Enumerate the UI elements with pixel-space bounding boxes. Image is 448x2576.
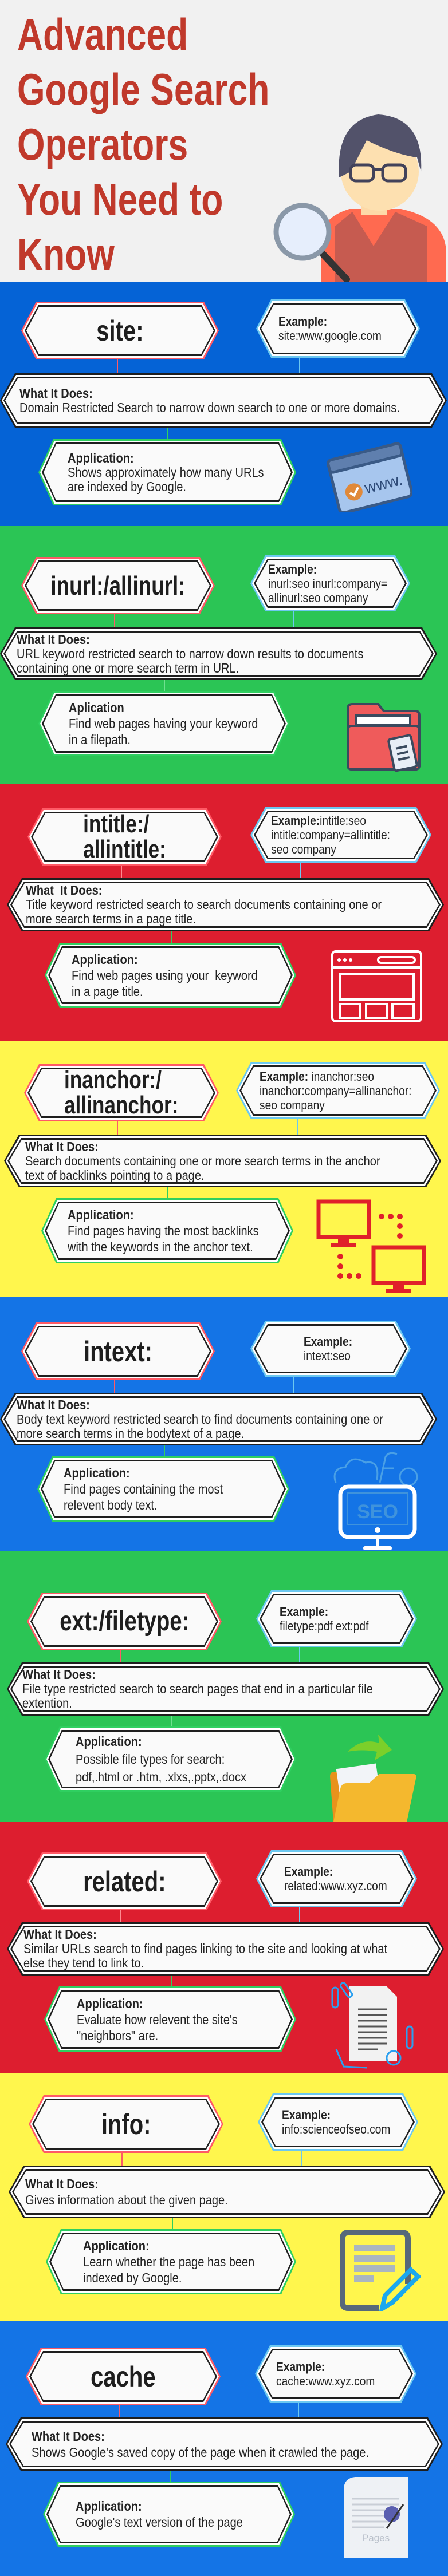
operator box <box>29 2095 223 2153</box>
example box <box>256 1850 417 1907</box>
example box: seo company <box>260 1098 325 1112</box>
application <box>45 1726 296 1792</box>
application: Application: <box>68 450 134 465</box>
example box: Example: <box>282 2108 331 2122</box>
icon: open folder with arrow <box>330 1735 416 1822</box>
application: in a filepath. <box>69 732 131 747</box>
what it does: Shows Google's saved copy of the page when it crawled the page. <box>32 2444 369 2459</box>
operator box: intext: <box>84 1335 152 1367</box>
example box <box>250 555 410 611</box>
what it does: What It Does: <box>25 2176 99 2191</box>
title: Know <box>17 229 115 279</box>
application: Find web pages using your keyword <box>72 967 258 982</box>
icon: pages document: Pages <box>362 2532 390 2543</box>
panel: site <box>0 282 448 526</box>
title: Operators <box>17 119 188 169</box>
icon: web layout <box>331 950 422 1022</box>
example box: inurl:seo inurl:company= <box>268 576 387 591</box>
example box: Example: <box>280 1605 328 1619</box>
example box: Example: <box>284 1864 333 1879</box>
operator box: info: <box>101 2108 151 2140</box>
application: Learn whether the page has been <box>83 2254 254 2269</box>
application: with the keywords in the anchor text. <box>68 1239 253 1254</box>
application <box>41 1198 293 1263</box>
what it does: else they tend to link to. <box>23 1955 144 1970</box>
title <box>17 9 269 279</box>
header <box>0 0 448 282</box>
panel: filetype <box>0 1551 448 1822</box>
application: pdf,.html or .htm, .xlxs,.pptx,.docx <box>76 1769 246 1784</box>
what it does: containing one or more search term in URL. <box>17 661 239 675</box>
example box: intitle:company=allintitle: <box>271 828 390 842</box>
icon: linked monitors <box>316 1200 426 1293</box>
application: Evaluate how relevent the site's <box>77 2012 238 2026</box>
example box: allinurl:seo company <box>268 591 368 605</box>
application <box>43 2482 295 2547</box>
example box: Example: <box>278 314 327 329</box>
application: Find pages having the most backlinks <box>68 1223 259 1238</box>
icon: notepad with pencil <box>340 2230 421 2311</box>
what it does: What It Does: <box>19 386 93 401</box>
operator box <box>21 302 219 359</box>
what it does: Domain Restricted Search to narrow down search to one or more domains. <box>19 400 400 414</box>
example box <box>236 1062 440 1119</box>
icon: www browser: www. <box>362 471 404 497</box>
example box: Example: <box>268 562 317 576</box>
icon: document with paperclips <box>331 1982 414 2069</box>
application <box>37 1456 289 1522</box>
example box: related:www.xyz.com <box>284 1879 387 1893</box>
icon: pages document <box>344 2477 408 2558</box>
what it does <box>7 878 444 931</box>
application: Application: <box>76 2499 142 2514</box>
panel: inanchor <box>0 1041 448 1297</box>
operator box <box>21 557 215 614</box>
title: Google Search <box>17 64 269 114</box>
operator box <box>21 1322 215 1380</box>
application: relevent body text. <box>64 1498 158 1512</box>
icon: folder <box>347 703 421 772</box>
what it does: extention. <box>22 1696 72 1710</box>
what it does <box>7 1922 444 1976</box>
operator box: site: <box>96 315 144 347</box>
panel: cache <box>0 2321 448 2576</box>
title: Advanced <box>17 9 188 60</box>
icon: SEO monitor: SEO <box>357 1501 398 1523</box>
example box: inanchor:company=allinanchor: <box>260 1083 411 1098</box>
example box <box>256 1590 417 1647</box>
example box: Example: <box>276 2360 325 2374</box>
example box: filetype:pdf ext:pdf <box>280 1619 368 1633</box>
what it does: What It Does: <box>17 1397 90 1412</box>
title: You Need to <box>17 174 223 224</box>
what it does: Body text keyword restricted search to find documents containing one or <box>17 1412 383 1427</box>
example box <box>250 807 431 863</box>
application: Find pages containing the most <box>64 1481 223 1496</box>
operator box: allinanchor: <box>64 1091 179 1119</box>
operator box <box>26 2348 221 2405</box>
what it does: URL keyword restricted search to narrow down results to documents <box>17 646 363 661</box>
operator box: related: <box>83 1865 166 1897</box>
application: Application: <box>72 951 138 966</box>
operator box: inurl:/allinurl: <box>50 571 186 600</box>
operator box <box>27 1593 222 1650</box>
what it does <box>4 1135 441 1187</box>
what it does <box>0 627 437 680</box>
what it does: What It Does: <box>32 2428 105 2443</box>
application: Find web pages having your keyword <box>69 716 258 731</box>
what it does: What It Does: <box>17 632 90 647</box>
panel: intext <box>0 1297 448 1551</box>
example box: Example:intitle:seo <box>271 813 366 828</box>
example box: site:www.google.com <box>278 329 382 343</box>
application: indexed by Google. <box>83 2270 182 2285</box>
operator box: inanchor:/ <box>64 1066 162 1094</box>
application: Application: <box>68 1207 134 1222</box>
application <box>45 943 296 1008</box>
example box <box>256 299 420 358</box>
what it does: Search documents containing one or more search terms in the anchor <box>25 1153 380 1168</box>
what it does: What It Does: <box>25 1139 99 1154</box>
operator box: intitle:/ <box>83 810 149 838</box>
what it does: Title keyword restricted search to search documents containing one or <box>26 897 382 912</box>
what it does: Similar URLs search to find pages linking to the site and looking at what <box>23 1941 387 1956</box>
application: Application: <box>77 1996 143 2010</box>
panel: info <box>0 2073 448 2321</box>
example box <box>255 2345 416 2403</box>
application <box>38 439 296 505</box>
application: Application: <box>83 2238 150 2253</box>
example box <box>258 2093 418 2151</box>
application <box>44 1986 296 2052</box>
what it does <box>0 373 447 428</box>
application: Application: <box>64 1465 130 1480</box>
application: Aplication <box>69 700 124 715</box>
example box: info:scienceofseo.com <box>282 2122 390 2136</box>
example box: Example: inanchor:seo <box>260 1069 374 1083</box>
operator box <box>27 808 222 866</box>
icon: www browser <box>327 442 412 512</box>
example box: cache:www.xyz.com <box>276 2374 375 2388</box>
application: in a page title. <box>72 983 143 998</box>
application: Possible file types for search: <box>76 1752 225 1767</box>
what it does <box>9 2166 445 2218</box>
panel: intitle <box>0 784 448 1041</box>
example box: Example: <box>304 1334 352 1349</box>
what it does: File type restricted search to search pages that end in a particular file <box>22 1681 373 1696</box>
what it does: more search terms in a page title. <box>26 911 196 926</box>
example box: intext:seo <box>304 1349 351 1363</box>
operator box: cache <box>91 2361 156 2393</box>
operator box <box>27 1852 222 1910</box>
application: Google's text version of the page <box>76 2515 243 2530</box>
what it does <box>0 1393 437 1445</box>
panel: related <box>0 1822 448 2073</box>
operator box <box>24 1064 219 1121</box>
illustration: person with magnifier <box>274 114 446 282</box>
what it does: text of backlinks pointing to a page. <box>25 1168 205 1183</box>
panel: inurl <box>0 526 448 784</box>
application: Application: <box>76 1733 142 1748</box>
what it does: more search terms in the bodytext of a page. <box>17 1425 244 1440</box>
what it does: What It Does: <box>22 1667 96 1682</box>
what it does: What It Does: <box>26 883 102 898</box>
example box: seo company <box>271 842 336 856</box>
application: Shows approximately how many URLs <box>68 465 264 480</box>
what it does: What It Does: <box>23 1927 97 1942</box>
what it does: Gives information about the given page. <box>25 2192 228 2207</box>
what it does <box>7 1662 444 1716</box>
application: are indexed by Google. <box>68 479 186 493</box>
application <box>38 691 289 756</box>
what it does <box>6 2417 443 2471</box>
operator box: ext:/filetype: <box>60 1606 189 1636</box>
application: "neighbors" are. <box>77 2028 158 2042</box>
icon: SEO monitor <box>333 1452 418 1550</box>
example box <box>250 1321 411 1377</box>
application <box>46 2229 296 2294</box>
operator box: allintitle: <box>83 835 166 863</box>
